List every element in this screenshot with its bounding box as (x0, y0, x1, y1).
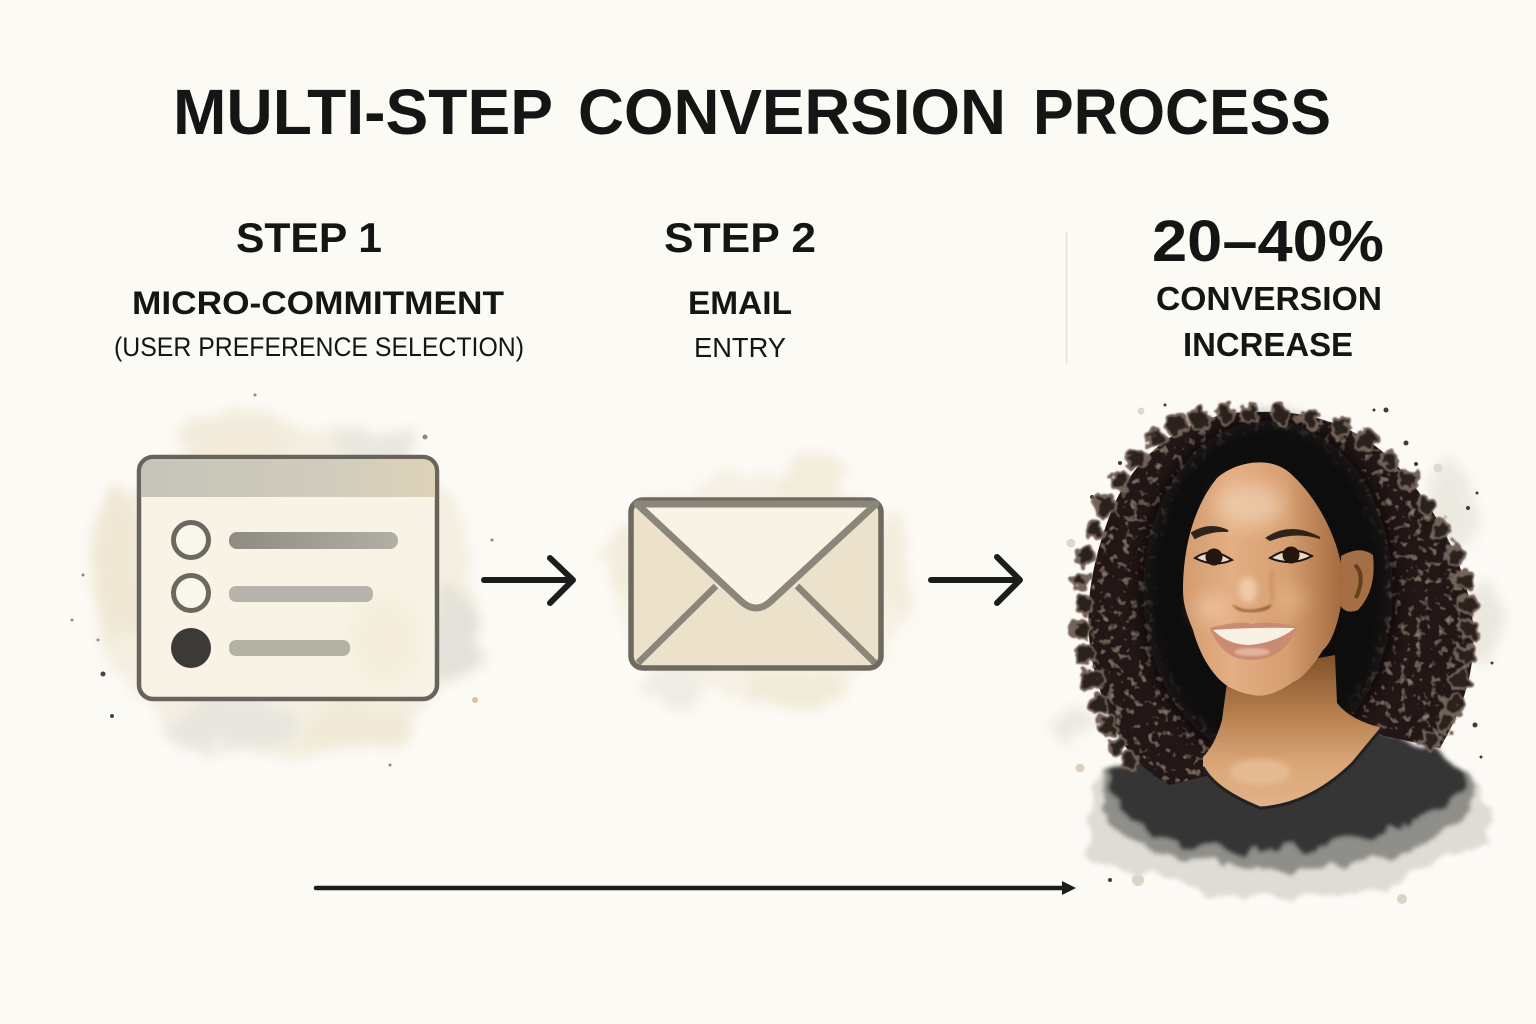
step 1 label: STEP 1 (236, 214, 382, 261)
title: MULTI-STEP (173, 76, 553, 148)
watercolor wash: step 1 (90, 412, 478, 755)
icon: email envelope (631, 500, 881, 668)
neckline (1203, 728, 1382, 808)
option line 2 (229, 586, 373, 602)
shirt dark core (1108, 730, 1466, 851)
neck and chest (1203, 655, 1382, 808)
envelope flap (637, 504, 876, 608)
face (1183, 462, 1343, 696)
step 2 description: ENTRY (694, 332, 786, 363)
arrow: step 2 to result (931, 557, 1020, 603)
forehead highlight (1216, 483, 1284, 527)
hair mass (1088, 412, 1473, 785)
window warm tint (350, 595, 420, 685)
left cheek highlight (1196, 594, 1228, 622)
watercolor wash: step 2 (604, 456, 911, 708)
step 2 title: EMAIL (688, 285, 792, 321)
step 2 label: STEP 2 (664, 214, 816, 261)
result heading (1152, 209, 1384, 363)
result line 1: CONVERSION (1156, 280, 1382, 317)
result percentage: 20–40% (1152, 209, 1384, 274)
nose (1232, 570, 1274, 612)
step 1 description: (USER PREFERENCE SELECTION) (114, 332, 524, 362)
radio option 2 (174, 576, 208, 610)
option line 1 (229, 532, 398, 549)
collarbone highlight (1230, 759, 1290, 785)
envelope body (631, 500, 881, 668)
vertical divider (1066, 232, 1068, 364)
hair curls at edge (1071, 405, 1478, 771)
lower lip highlight (1234, 648, 1270, 656)
envelope right fold (797, 586, 875, 663)
arrow: step 1 to step 2 (484, 558, 573, 603)
icon: preference selection window (139, 457, 437, 699)
shirt mid tone (1104, 768, 1472, 870)
window title bar (141, 459, 435, 497)
result line 2: INCREASE (1183, 326, 1353, 363)
watercolor splatter: step 1 (70, 394, 494, 766)
right eyebrow (1267, 530, 1320, 540)
title: CONVERSION (578, 76, 1006, 148)
right eye (1270, 546, 1312, 564)
inner black hair around face (1143, 420, 1393, 760)
left eye (1195, 548, 1232, 566)
envelope left fold (638, 586, 716, 663)
portrait: smiling woman (1055, 404, 1502, 904)
step 2 heading (664, 214, 816, 363)
long arrow: overall journey (316, 881, 1076, 895)
lips (1210, 623, 1297, 660)
portrait splatter (1066, 404, 1494, 904)
right cheek highlight (1276, 588, 1304, 612)
shirt (1087, 730, 1492, 897)
left eyebrow (1192, 527, 1228, 538)
title (173, 76, 1331, 148)
title: PROCESS (1033, 76, 1331, 148)
step 1 heading (114, 214, 524, 362)
radio option 1 (174, 522, 208, 558)
option line 3 (229, 640, 350, 656)
ear (1340, 550, 1374, 612)
shirt pale outer wash (1087, 770, 1492, 897)
step 1 title: MICRO-COMMITMENT (132, 285, 504, 321)
window body (139, 457, 437, 699)
portrait wash (1055, 468, 1502, 739)
radio option 3 selected (171, 628, 211, 668)
teeth (1213, 628, 1295, 645)
